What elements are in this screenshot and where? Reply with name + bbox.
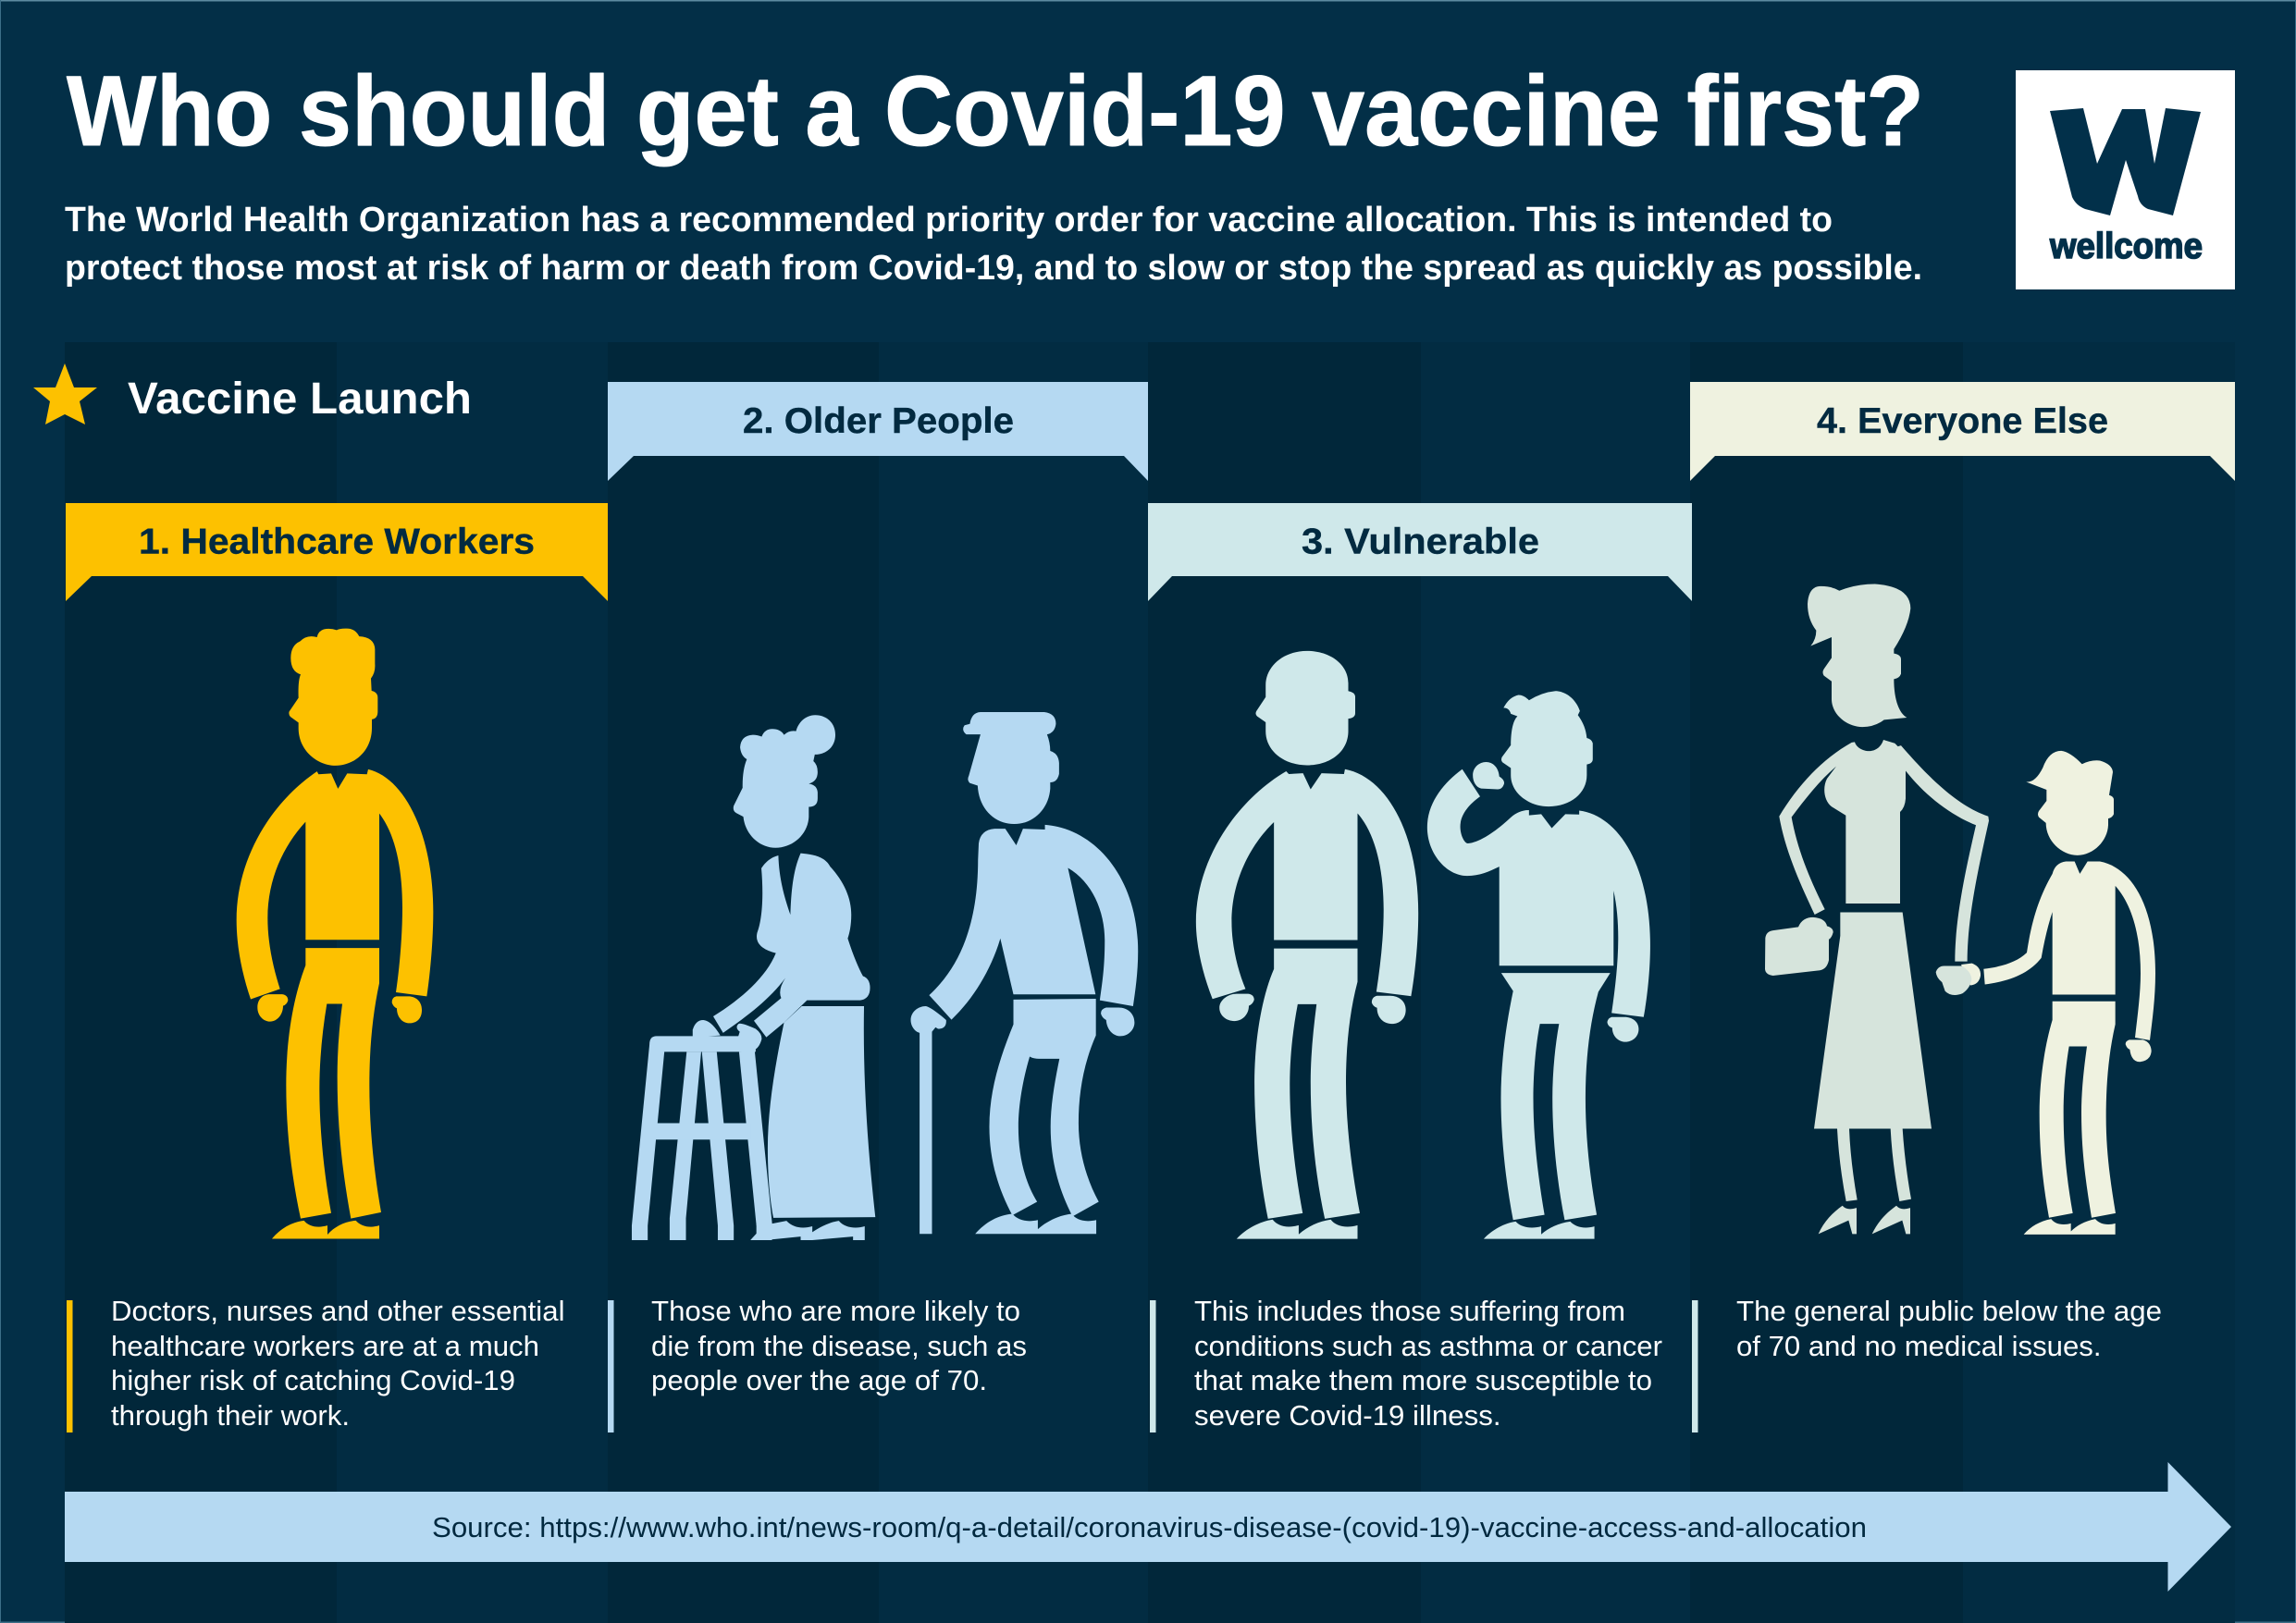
intro text: protect those most at risk of harm or death from Covid-19, and to slow or stop the spread as quickly as possible. (65, 249, 1922, 288)
logo: wellcome: wellcome (2049, 227, 2203, 266)
text block: everyone else: of 70 and no medical issues. (1736, 1331, 2102, 1362)
banner: 4. Everyone Else (1690, 382, 2235, 481)
text block: vulnerable: that make them more susceptible to (1194, 1365, 1652, 1396)
figure: woman with handbag (1765, 584, 1989, 1234)
banner: 3. Vulnerable: 3. Vulnerable (1302, 522, 1539, 562)
text block: everyone else (1692, 1296, 2162, 1432)
arrow: timeline with source (65, 1462, 2231, 1592)
text block: older people: Those who are more likely to (651, 1296, 1020, 1327)
banner: 2. Older People (608, 382, 1148, 481)
banner: 1. Healthcare Workers (66, 503, 608, 601)
figure: older man with cane (911, 712, 1138, 1234)
banner: 4. Everyone Else: 4. Everyone Else (1817, 401, 2108, 441)
figure: older woman with walking frame (632, 715, 875, 1240)
text block: vulnerable: conditions such as asthma or cancer (1194, 1331, 1662, 1362)
text block: vulnerable: severe Covid-19 illness. (1194, 1400, 1500, 1432)
text block: healthcare workers: healthcare workers are at a much (111, 1331, 539, 1362)
figure: healthcare worker (237, 629, 433, 1238)
icon: vaccine launch star (33, 363, 97, 424)
figure: vulnerable man coughing (1427, 691, 1650, 1239)
banner: 1. Healthcare Workers: 1. Healthcare Workers (139, 522, 535, 562)
banner: 3. Vulnerable (1148, 503, 1692, 601)
banner: 2. Older People: 2. Older People (743, 401, 1014, 441)
figure: vulnerable man standing (1196, 651, 1418, 1239)
text block: older people (608, 1296, 1027, 1432)
arrow: timeline with source: Source: https://www.who.int/news-room/q-a-detail/coronavirus-disease-(covid-19)-vaccine-access-and-allocation (432, 1512, 1867, 1543)
title: Who should get a Covid-19 vaccine first? (67, 55, 1924, 166)
text block: vulnerable: This includes those suffering from (1194, 1296, 1625, 1327)
text block: older people: people over the age of 70. (651, 1365, 987, 1396)
text block: healthcare workers: through their work. (111, 1400, 350, 1432)
logo: wellcome (2016, 70, 2235, 289)
text block: vulnerable (1150, 1296, 1662, 1432)
text block: healthcare workers: Doctors, nurses and other essential (111, 1296, 564, 1327)
text block: healthcare workers: higher risk of catching Covid-19 (111, 1365, 515, 1396)
heading: vaccine launch: Vaccine Launch (128, 375, 472, 424)
intro text (65, 201, 1922, 288)
text block: everyone else: The general public below the age (1736, 1296, 2162, 1327)
text block: older people: die from the disease, such as (651, 1331, 1027, 1362)
text block: healthcare workers (67, 1296, 564, 1432)
figure: boy (1961, 751, 2155, 1235)
intro text: The World Health Organization has a recommended priority order for vaccine allocation. This is intended to (65, 201, 1833, 240)
